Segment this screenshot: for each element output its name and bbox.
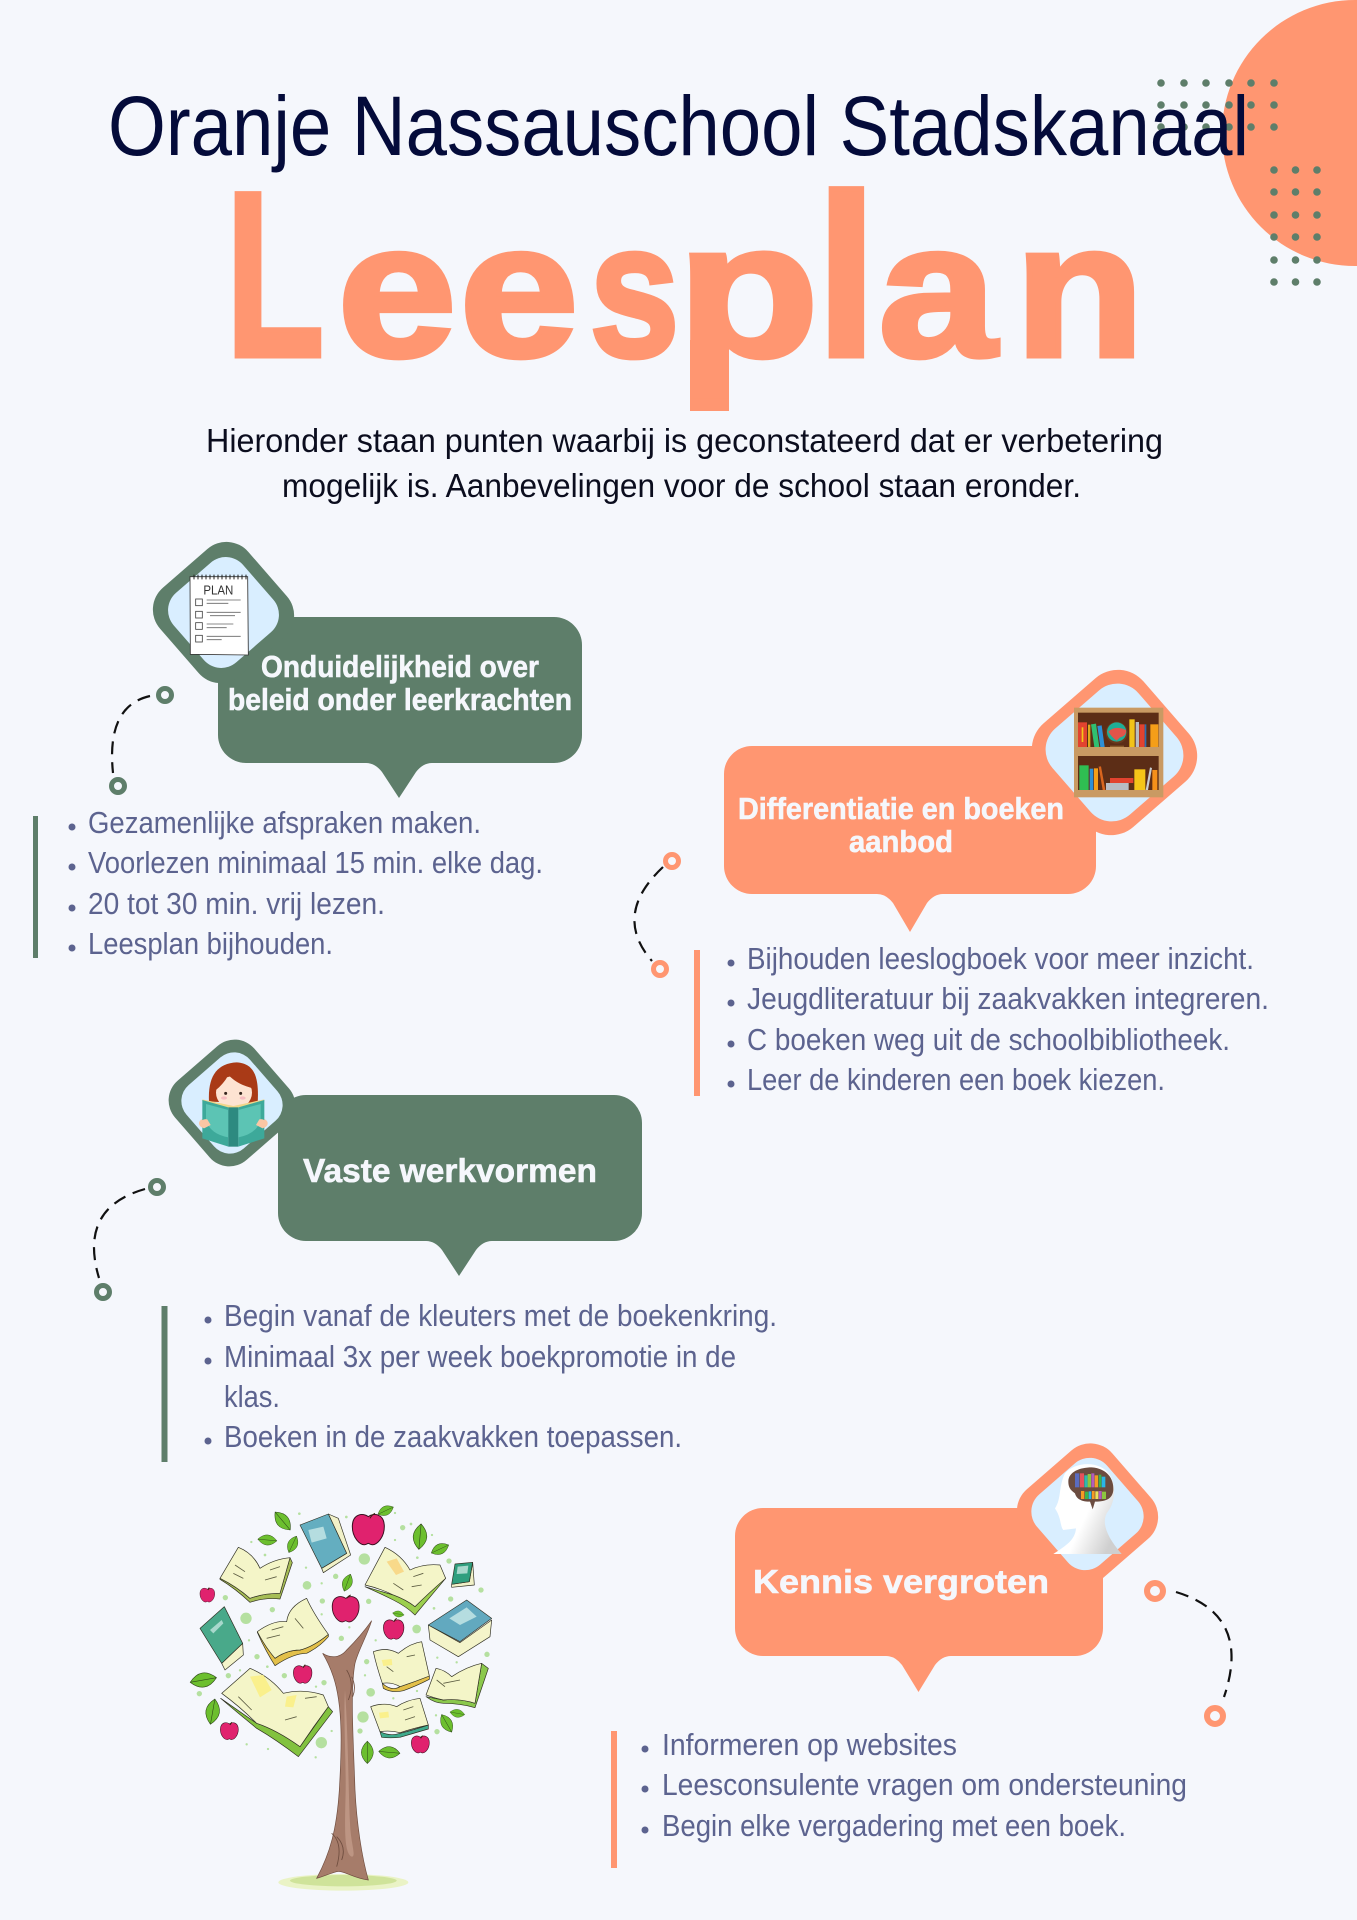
bullet list xyxy=(68,805,543,961)
dot grids xyxy=(1157,79,1321,286)
bubble heading xyxy=(738,791,1064,859)
heading: Leesplan: a xyxy=(878,184,998,397)
bullet list: C boeken weg uit de schoolbibliotheek. xyxy=(747,1022,1230,1057)
heading: Leesplan xyxy=(226,143,1144,411)
bubble heading: beleid onder leerkrachten xyxy=(228,682,572,717)
bullet list xyxy=(204,1298,777,1454)
dashed arrow xyxy=(112,688,172,792)
accent bar xyxy=(33,816,38,958)
bubble heading: Onduidelijkheid over xyxy=(261,649,539,684)
intro text xyxy=(206,422,1163,504)
heading: Leesplan: n xyxy=(1014,184,1144,397)
heading: Leesplan: e xyxy=(460,184,578,397)
heading: Leesplan: e xyxy=(338,184,456,397)
icon: bookshelf xyxy=(1074,708,1163,797)
panel: Differentiatie en boeken aanbod xyxy=(634,656,1269,1097)
dashed arrow xyxy=(634,854,678,976)
illustration: book tree xyxy=(189,1503,492,1891)
bullet list: Gezamenlijke afspraken maken. xyxy=(88,805,481,840)
panel: Kennis vergroten xyxy=(611,1431,1232,1868)
accent bar xyxy=(611,1731,617,1868)
icon: child reading xyxy=(199,1062,268,1147)
bullet list: Informeren op websites xyxy=(662,1727,957,1762)
bullet list: Bijhouden leeslogboek voor meer inzicht. xyxy=(747,941,1254,976)
icon frame xyxy=(141,530,306,695)
speech bubble xyxy=(724,746,1096,932)
bubble heading: Kennis vergroten xyxy=(753,1563,1049,1600)
bubble heading xyxy=(228,649,572,717)
bullet list: 20 tot 30 min. vrij lezen. xyxy=(88,886,385,921)
speech bubble xyxy=(218,617,582,798)
bullet list: Leer de kinderen een boek kiezen. xyxy=(747,1062,1165,1097)
bubble heading: aanbod xyxy=(849,824,953,859)
bullet list: Begin vanaf de kleuters met de boekenkring. xyxy=(224,1298,777,1333)
icon: head with book brain xyxy=(1053,1464,1122,1554)
bullet list xyxy=(728,941,1269,1097)
bullet list: Boeken in de zaakvakken toepassen. xyxy=(224,1419,682,1454)
dashed arrow xyxy=(1147,1583,1232,1724)
icon: plan notepad: PLAN xyxy=(203,584,233,598)
panel: Vaste werkvormen xyxy=(94,1029,777,1462)
bullet list: Leesplan bijhouden. xyxy=(88,926,333,961)
icon frame xyxy=(1018,656,1211,849)
accent bar xyxy=(162,1306,168,1462)
bullet list: Voorlezen minimaal 15 min. elke dag. xyxy=(88,845,543,880)
panel: Onduidelijkheid over beleid xyxy=(33,530,582,961)
bullet list: Begin elke vergadering met een boek. xyxy=(662,1808,1126,1843)
intro text: mogelijk is. Aanbevelingen voor de school staan eronder. xyxy=(282,467,1081,504)
icon frame xyxy=(1005,1431,1170,1597)
bullet list xyxy=(642,1727,1187,1843)
icon frame xyxy=(158,1029,306,1177)
intro text: Hieronder staan punten waarbij is geconstateerd dat er verbetering xyxy=(206,422,1163,459)
heading: Leesplan: s xyxy=(590,184,680,397)
dashed arrow xyxy=(94,1180,164,1298)
bullet list: klas. xyxy=(224,1379,280,1414)
heading: Leesplan: l xyxy=(816,147,878,405)
accent bar xyxy=(694,950,700,1096)
icon: plan notepad xyxy=(190,575,248,655)
bullet list: Jeugdliteratuur bij zaakvakken integreren. xyxy=(747,981,1269,1016)
heading: Leesplan: L xyxy=(226,143,324,407)
speech bubble xyxy=(735,1508,1103,1692)
bullet list: Leesconsulente vragen om ondersteuning xyxy=(662,1767,1187,1802)
speech bubble xyxy=(278,1095,642,1276)
heading: Leesplan: p xyxy=(677,184,819,397)
bubble heading: Differentiatie en boeken xyxy=(738,791,1064,826)
decorative orange circle xyxy=(1222,0,1357,266)
bullet list: Minimaal 3x per week boekpromotie in de xyxy=(224,1339,736,1374)
bubble heading: Vaste werkvormen xyxy=(303,1152,597,1189)
